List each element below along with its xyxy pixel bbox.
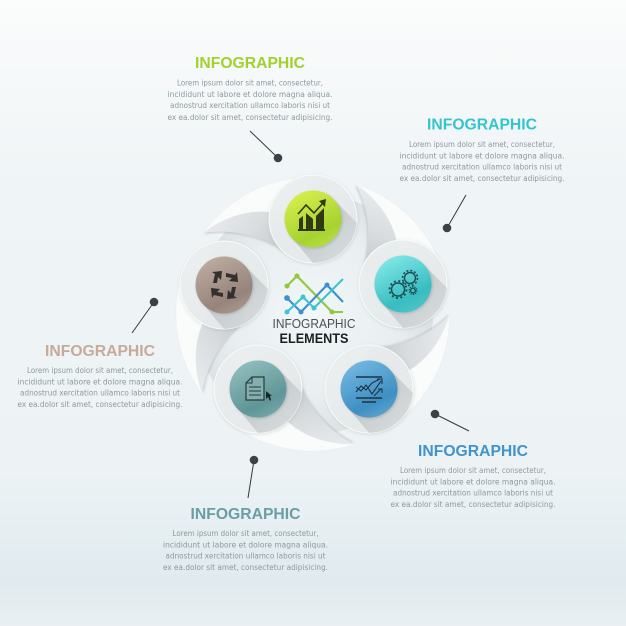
blade: top-left: [203, 177, 325, 252]
node: bottom-left teal: [214, 345, 302, 433]
text block: bottom: INFOGRAPHIC: [190, 506, 301, 523]
text block: top: incididunt ut labore et dolore magna aliqua.: [168, 90, 332, 99]
text block: bottom: Lorem ipsum dolor sit amet, consectetur,: [172, 529, 318, 538]
text block: bottom-right: [390, 443, 556, 509]
blade: bottom-right: [340, 300, 483, 432]
center title: ELEMENTS: [280, 331, 348, 346]
text block: bottom-right: ex ea.dolor sit amet, consectetur adipisicing.: [390, 500, 556, 509]
center title: [272, 316, 356, 346]
text block: bottom-right: Lorem ipsum dolor sit amet, consectetur,: [400, 466, 546, 475]
center title: INFOGRAPHIC: [272, 316, 356, 331]
text block: right: Lorem ipsum dolor sit amet, consectetur,: [409, 140, 555, 149]
icon: document with cursor: [246, 377, 272, 401]
text block: top: Lorem ipsum dolor sit amet, consectetur,: [177, 78, 323, 88]
text block: bottom-right: adnostrud xercitation ullamco laboris nisi ut: [393, 488, 553, 498]
text block: bottom: ex ea.dolor sit amet, consectetur adipisicing.: [163, 563, 328, 572]
text block: top: ex ea.dolor sit amet, consectetur adipisicing.: [168, 113, 332, 122]
text block: left: adnostrud xercitation ullamco laboris nisi ut: [20, 388, 180, 398]
text block: left: [18, 343, 182, 409]
icon: gears: [390, 270, 418, 298]
cyan line: [286, 279, 343, 314]
node: bottom-right blue: [325, 345, 413, 433]
text block: bottom: adnostrud xercitation ullamco laboris nisi ut: [166, 552, 326, 560]
text block: bottom-right: incididunt ut labore et dolore magna aliqua.: [390, 478, 556, 486]
text block: left: Lorem ipsum dolor sit amet, consectetur,: [27, 366, 173, 375]
text block: left: incididunt ut labore et dolore magna aliqua.: [18, 378, 182, 386]
blade: left: [149, 260, 258, 399]
node: top green: [269, 175, 357, 263]
text block: right: adnostrud xercitation ullamco laboris nisi ut: [402, 162, 562, 172]
text block: left: ex ea.dolor sit amet, consectetur adipisicing.: [18, 400, 182, 409]
green line: [286, 274, 343, 314]
center logo chart: [285, 274, 343, 314]
blue line: [285, 284, 343, 314]
icon: recycle arrows: [211, 271, 238, 299]
text block: top: adnostrud xercitation ullamco laboris nisi ut: [170, 101, 330, 110]
text block: right: incididunt ut labore et dolore magna aliqua.: [400, 152, 564, 160]
blade: bottom-left: [223, 357, 366, 489]
text block: bottom-right: INFOGRAPHIC: [418, 443, 528, 460]
text block: top: [168, 55, 332, 122]
pin: bottom: [248, 456, 258, 498]
blade: top-right: [338, 167, 447, 306]
text block: top: INFOGRAPHIC: [195, 55, 305, 72]
pin: right: [443, 195, 466, 232]
icon: monitor chart: [356, 377, 382, 402]
text block: right: INFOGRAPHIC: [427, 116, 537, 134]
pin: bottom-right: [431, 410, 469, 431]
text block: right: ex ea.dolor sit amet, consectetur adipisicing.: [400, 174, 564, 183]
center disc: [193, 194, 433, 434]
text block: bottom: incididunt ut labore et dolore magna aliqua.: [163, 540, 328, 550]
pinwheel diagram: [149, 167, 483, 489]
node: left brown: [180, 241, 268, 329]
text block: left: INFOGRAPHIC: [45, 343, 155, 360]
icon: bar chart: [298, 199, 326, 231]
text block: bottom: [163, 506, 328, 572]
node: right cyan: [359, 240, 447, 328]
pin: top: [250, 131, 282, 162]
pin: left: [132, 298, 158, 333]
text block: right: [400, 116, 564, 183]
